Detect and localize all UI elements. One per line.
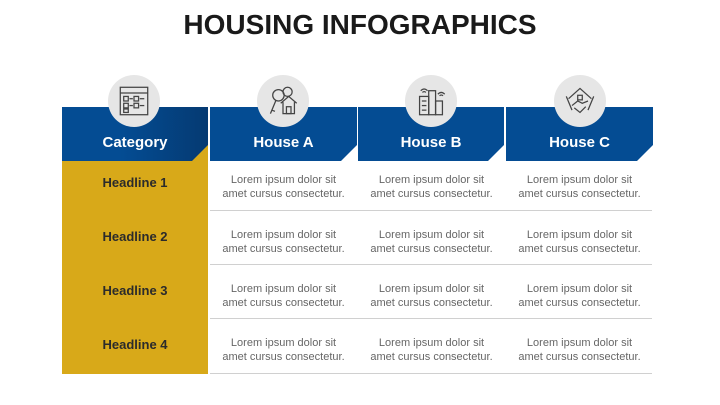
category column gold <box>62 140 208 374</box>
text: Headline 4 <box>102 337 168 352</box>
text: Lorem ipsum dolor sit <box>379 229 484 241</box>
text: Lorem ipsum dolor sit <box>231 283 336 295</box>
text: amet cursus consectetur. <box>370 297 493 309</box>
text: amet cursus consectetur. <box>518 297 641 309</box>
text: Headline 1 <box>102 175 168 190</box>
text: Lorem ipsum dolor sit <box>379 174 484 186</box>
icon: table <box>108 75 160 127</box>
text: amet cursus consectetur. <box>518 188 641 200</box>
text: Lorem ipsum dolor sit <box>527 283 632 295</box>
header: Category: Category <box>102 134 168 151</box>
text: amet cursus consectetur. <box>370 188 493 200</box>
body cells <box>222 174 641 363</box>
header: House B <box>358 107 504 161</box>
text: amet cursus consectetur. <box>370 243 493 255</box>
header: House C: House C <box>549 134 610 151</box>
text: amet cursus consectetur. <box>222 188 345 200</box>
text: Lorem ipsum dolor sit <box>527 174 632 186</box>
text: amet cursus consectetur. <box>222 243 345 255</box>
text: Lorem ipsum dolor sit <box>231 174 336 186</box>
text: Lorem ipsum dolor sit <box>231 229 336 241</box>
text: Lorem ipsum dolor sit <box>527 337 632 349</box>
text: amet cursus consectetur. <box>518 243 641 255</box>
header: House A <box>210 107 357 161</box>
text: amet cursus consectetur. <box>518 351 641 363</box>
header: House A: House A <box>253 134 314 151</box>
header: Category <box>62 107 208 161</box>
text: amet cursus consectetur. <box>370 351 493 363</box>
icon: handshake house <box>554 75 606 127</box>
text: Lorem ipsum dolor sit <box>379 337 484 349</box>
text: amet cursus consectetur. <box>222 351 345 363</box>
header: House B: House B <box>401 134 461 151</box>
text: Lorem ipsum dolor sit <box>527 229 632 241</box>
icon: key house <box>257 75 309 127</box>
title: HOUSING INFOGRAPHICS <box>183 9 537 40</box>
text: Lorem ipsum dolor sit <box>231 337 336 349</box>
headlines <box>102 175 168 352</box>
header: House C <box>506 107 653 161</box>
icon: buildings <box>405 75 457 127</box>
text: Headline 3 <box>102 283 168 298</box>
text: amet cursus consectetur. <box>222 297 345 309</box>
text: Lorem ipsum dolor sit <box>379 283 484 295</box>
text: Headline 2 <box>102 229 168 244</box>
